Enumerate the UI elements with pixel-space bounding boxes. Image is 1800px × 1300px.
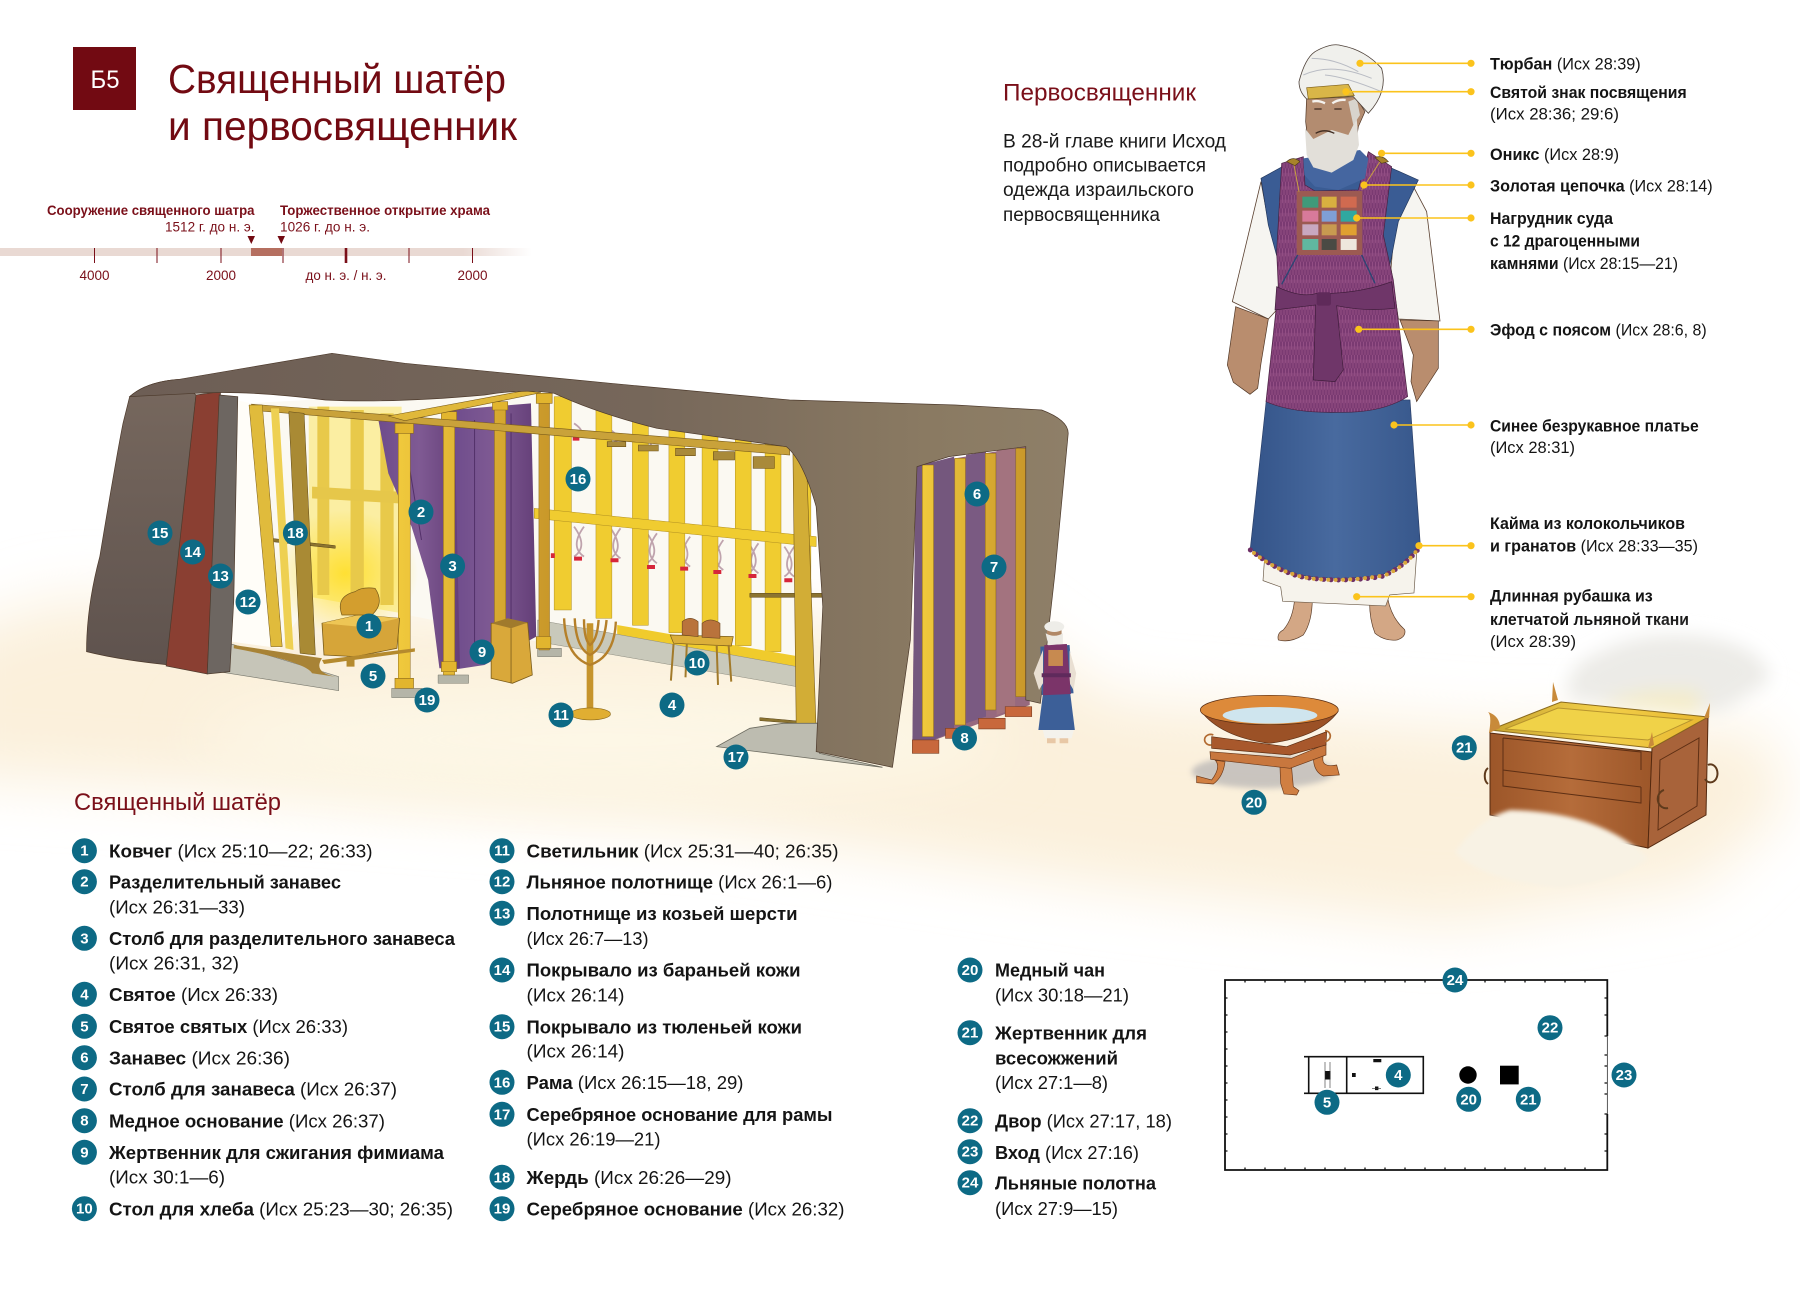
item 22: Двор (Исх 27:17, 18): [995, 1112, 1172, 1132]
title: Священный шатёр: [168, 56, 506, 102]
plan marker 24: 24: [1447, 972, 1464, 989]
item 2: Разделительный занавес: [109, 872, 341, 892]
laver bowl: [1201, 711, 1338, 743]
item 17: [490, 1102, 832, 1150]
marker 10: [684, 650, 710, 676]
item 17: (Исх 26:19—21): [526, 1130, 660, 1150]
laver stand: [1210, 744, 1326, 768]
plan marker 22: 22: [1542, 1020, 1558, 1037]
item 5: 5: [80, 1018, 89, 1035]
marker 12: 12: [240, 594, 256, 611]
altar horns: [1488, 682, 1710, 748]
laver water: [1223, 707, 1317, 724]
tabernacle outline: [1304, 1057, 1423, 1093]
label: hem: Кайма из колокольчиков: [1490, 515, 1685, 533]
holy crown band: [1307, 84, 1354, 99]
marker 16: [566, 466, 590, 492]
label: ephod: Эфод с поясом (Исх 28:6, 8): [1490, 322, 1707, 340]
linen curtain: [231, 399, 280, 648]
item 15: [490, 1014, 802, 1062]
fringe of bells and pomegranates: [1250, 547, 1420, 580]
item 10: Стол для хлеба (Исх 25:23—30; 26:35): [109, 1199, 453, 1219]
marker 18: 18: [287, 525, 304, 542]
callout: onyx: [1378, 150, 1475, 157]
back wall: [249, 387, 816, 688]
laver symbol: [1459, 1066, 1477, 1084]
bronze altar: [1455, 682, 1717, 888]
item 4: 4: [80, 986, 89, 1003]
marker 3: [440, 554, 465, 578]
item 8: [72, 1108, 385, 1133]
item 12: Льняное полотнище (Исх 26:1—6): [526, 872, 833, 892]
label: breastplate: [1490, 210, 1678, 273]
marker 5: [360, 664, 386, 688]
marker 7: [982, 554, 1006, 580]
plan marker 21: 21: [1520, 1091, 1537, 1108]
marker 7: 7: [990, 559, 998, 576]
marker 2: 2: [417, 504, 425, 521]
plan furniture: [1325, 1059, 1381, 1090]
face details: [1312, 100, 1346, 103]
list column 2: [490, 838, 844, 1221]
arms and hands: [1227, 307, 1438, 402]
marker 3: 3: [448, 558, 457, 575]
marker 9: [470, 640, 494, 664]
marker 8: 8: [960, 730, 969, 747]
turban: [1299, 45, 1383, 113]
ark of the covenant: [322, 588, 415, 667]
left socket row: [207, 644, 339, 691]
label: shirt: Длинная рубашка из: [1490, 588, 1653, 606]
callout: shirt: [1353, 593, 1475, 600]
marker 17: [724, 744, 748, 770]
item 2: [72, 869, 341, 917]
altar front face: [1490, 733, 1652, 848]
item 19: Серебряное основание (Исх 26:32): [526, 1199, 844, 1219]
item 24: 24: [962, 1175, 979, 1192]
item 11: Светильник (Исх 25:31—40; 26:35): [526, 841, 838, 861]
item 6: 6: [80, 1050, 89, 1067]
marker 12: [236, 590, 260, 614]
item 9: (Исх 30:1—6): [109, 1168, 225, 1188]
item 15: Покрывало из тюленьей кожи: [526, 1017, 802, 1037]
sand mound: [1455, 810, 1648, 888]
marker 5: 5: [369, 668, 377, 685]
marker 15: [148, 520, 172, 546]
callout: chain: [1360, 181, 1475, 189]
item 13: (Исх 26:7—13): [526, 929, 648, 949]
inner veil: [378, 403, 536, 670]
high priest section heading: Первосвященник: [1003, 80, 1196, 107]
plan marker 24: [1442, 968, 1468, 992]
lampstand: [564, 618, 616, 720]
item 23: 23: [962, 1144, 978, 1161]
marker 2: [408, 500, 434, 524]
marker 14: 14: [184, 544, 202, 561]
marker 19: [414, 688, 440, 712]
item 22: [958, 1108, 1172, 1133]
laver marker: [1242, 790, 1266, 815]
item 4: Святое (Исх 26:33): [109, 985, 278, 1005]
plan marker 20: [1456, 1087, 1481, 1112]
plan marker 4: 4: [1394, 1067, 1403, 1084]
label: holy sign: Святой знак посвящения: [1490, 84, 1687, 102]
marker 16: 16: [570, 471, 586, 488]
item 16: [490, 1070, 744, 1095]
plan marker 23: [1612, 1062, 1636, 1088]
bronze laver: [1192, 695, 1339, 795]
label: shirt: (Исх 28:39): [1490, 633, 1576, 651]
list column 3: [958, 958, 1172, 1219]
label: robe: Синее безрукавное платье: [1490, 418, 1699, 436]
plan marker 5: [1314, 1090, 1340, 1115]
label: shirt: [1490, 588, 1689, 651]
item 10: 10: [76, 1201, 93, 1218]
label: holy sign: (Исх 28:36; 29:6): [1490, 105, 1619, 123]
item 13: [490, 901, 798, 949]
laver feet: [1197, 755, 1339, 795]
item 14: 14: [494, 962, 511, 979]
item 20: Медный чан: [995, 961, 1105, 981]
smoke: [1568, 635, 1770, 715]
timeline: 2000: [457, 268, 488, 283]
marker 8: [952, 726, 977, 750]
altar front panels: [1503, 738, 1641, 803]
title badge Б5: Б5: [90, 66, 120, 94]
item 4: [72, 982, 278, 1007]
item 17: Серебряное основание для рамы: [526, 1105, 832, 1125]
marker 17: 17: [728, 749, 744, 766]
item 16: Рама (Исх 26:15—18, 29): [526, 1073, 744, 1093]
item 14: (Исх 26:14): [526, 985, 624, 1005]
callout: ephod: [1355, 326, 1475, 333]
timeline: 2000: [206, 268, 236, 283]
sash: [1275, 282, 1395, 382]
high priest figure: [1227, 45, 1440, 641]
blue robe: [1250, 400, 1420, 578]
item 3: (Исх 26:31, 32): [109, 954, 239, 974]
linen sleeves: [1232, 182, 1440, 321]
item 21: всесожжений: [995, 1048, 1118, 1068]
tent number markers: [148, 466, 1006, 770]
item 13: 13: [494, 905, 510, 922]
title: и первосвященник: [168, 103, 518, 149]
label: robe: [1490, 418, 1699, 457]
shoulder robe: [1261, 163, 1418, 265]
marker 6: 6: [973, 486, 981, 503]
item 5: [72, 1014, 348, 1039]
item 21: [958, 1020, 1147, 1093]
laver rings: [1205, 731, 1330, 745]
marker 13: 13: [212, 568, 229, 585]
item 2: (Исх 26:31—33): [109, 897, 245, 917]
beams and crossbars: [249, 391, 823, 725]
marker 11: [548, 702, 574, 728]
altar right face: [1648, 717, 1708, 848]
item 9: 9: [80, 1144, 89, 1161]
title badge Б5: [73, 47, 136, 110]
item 15: 15: [494, 1019, 510, 1036]
marker 18: [283, 520, 308, 546]
callout: breastplate: [1353, 214, 1475, 222]
tabernacle list heading: Священный шатёр: [74, 789, 281, 816]
item 18: 18: [494, 1169, 510, 1186]
callout: hem: [1415, 542, 1475, 549]
list column 1: [72, 838, 456, 1221]
high priest small figure: [1034, 621, 1076, 743]
showbread table: [670, 618, 733, 685]
incense altar: [491, 618, 532, 683]
front wall frame post: [717, 453, 882, 767]
plan marker 22: [1538, 1015, 1562, 1040]
high priest description: подробно описывается: [1003, 156, 1206, 177]
label: hem: и гранатов (Исх 28:33—35): [1490, 538, 1698, 556]
item 18: Жердь (Исх 26:26—29): [525, 1168, 732, 1188]
item 20: [958, 958, 1129, 1006]
beard: [1305, 118, 1359, 173]
altar marker: [1452, 735, 1477, 760]
timeline: 1026 г. до н. э.: [280, 220, 370, 234]
desert ground glow: [0, 600, 1790, 925]
altar right panel: [1658, 738, 1699, 830]
timeline: [0, 203, 532, 283]
label: breastplate: с 12 драгоценными: [1490, 233, 1640, 251]
long linen shirt: [1263, 544, 1417, 606]
courtyard plan: [1225, 968, 1636, 1170]
item 2: 2: [80, 874, 89, 891]
marker 11: 11: [553, 707, 569, 724]
item 22: 22: [962, 1113, 978, 1130]
item 7: Столб для занавеса (Исх 26:37): [109, 1080, 397, 1100]
timeline: до н. э. / н. э.: [306, 268, 386, 283]
callout: holy sign: [1342, 88, 1475, 95]
item 1: 1: [80, 843, 89, 860]
item 23: Вход (Исх 27:16): [995, 1143, 1139, 1163]
item 14: Покрывало из бараньей кожи: [526, 961, 800, 981]
item 24: [958, 1170, 1157, 1219]
item 1: [72, 838, 373, 863]
marker 4: 4: [668, 697, 677, 714]
item 21: 21: [962, 1025, 978, 1042]
plan marker 20: 20: [1460, 1091, 1477, 1108]
high priest description: одежда израильского: [1003, 180, 1194, 201]
seal skin covering: [87, 379, 196, 665]
item 3: 3: [80, 930, 89, 947]
label: hem: [1490, 515, 1698, 556]
plan marker 21: [1516, 1087, 1541, 1112]
marker 4: [660, 692, 684, 718]
label: breastplate: Нагрудник суда: [1490, 210, 1614, 228]
marker 1: [356, 614, 382, 638]
laver rim: [1200, 695, 1338, 725]
marker 9: 9: [478, 644, 486, 661]
ephod: [1266, 152, 1408, 412]
item 9: Жертвенник для сжигания фимиама: [108, 1143, 445, 1163]
item 3: Столб для разделительного занавеса: [109, 929, 456, 949]
ram skin covering: [166, 392, 221, 674]
item 5: Святое святых (Исх 26:33): [109, 1017, 348, 1037]
item 7: [72, 1076, 397, 1102]
label: onyx: Оникс (Исх 28:9): [1490, 146, 1619, 164]
item 20: (Исх 30:18—21): [995, 986, 1129, 1006]
item 21: (Исх 27:1—8): [995, 1073, 1108, 1093]
item 19: 19: [494, 1201, 510, 1218]
item 23: [958, 1139, 1139, 1164]
priest garment labels: [1490, 55, 1713, 651]
item 1: Ковчег (Исх 25:10—22; 26:33): [109, 841, 372, 861]
item 8: Медное основание (Исх 26:37): [109, 1111, 385, 1131]
item 21: Жертвенник для: [994, 1023, 1147, 1043]
marker 19: 19: [419, 692, 435, 709]
item 16: 16: [494, 1074, 510, 1091]
callout: turban: [1356, 60, 1475, 67]
marker 14: [180, 540, 205, 564]
marker 10: 10: [689, 655, 705, 672]
plan marker 23: 23: [1616, 1067, 1632, 1084]
entrance screen curtains: [912, 446, 1032, 753]
left frames: [249, 405, 315, 655]
label: turban: Тюрбан (Исх 28:39): [1490, 55, 1641, 73]
marker 1: 1: [365, 618, 373, 635]
high priest description: В 28-й главе книги Исход: [1003, 131, 1226, 152]
sash knot: [1317, 292, 1331, 306]
onyx stones: [1287, 157, 1388, 166]
item 11: [490, 838, 838, 863]
plan marker 4: [1386, 1062, 1411, 1088]
item 13: Полотнище из козьей шерсти: [526, 904, 798, 924]
item 24: Льняные полотна: [995, 1173, 1157, 1193]
laver marker: 20: [1246, 794, 1262, 811]
altar symbol: [1500, 1066, 1519, 1084]
item 14: [490, 958, 800, 1005]
goat hair covering: [207, 395, 238, 674]
laver frame: [1212, 732, 1327, 755]
item 3: [72, 926, 456, 974]
item 7: 7: [80, 1081, 89, 1098]
timeline: 1512 г. до н. э.: [165, 220, 254, 234]
item 6: Занавес (Исх 26:36): [109, 1048, 290, 1068]
label: shirt: клетчатой льняной ткани: [1490, 611, 1689, 629]
marker 15: 15: [152, 525, 168, 542]
label: breastplate: камнями (Исх 28:15—21): [1490, 255, 1678, 273]
item 8: 8: [80, 1113, 89, 1130]
label: robe: (Исх 28:31): [1490, 439, 1575, 457]
altar marker: 21: [1456, 740, 1473, 757]
item 12: 12: [494, 874, 510, 891]
timeline: Сооружение священного шатра: [47, 203, 255, 218]
head: [1306, 97, 1365, 145]
tabernacle illustration: [87, 353, 1076, 767]
feet: [1278, 598, 1405, 641]
timeline: 4000: [79, 268, 110, 283]
item 24: (Исх 27:9—15): [995, 1199, 1118, 1219]
label: chain: Золотая цепочка (Исх 28:14): [1490, 178, 1713, 196]
timeline: Торжественное открытие храма: [280, 203, 490, 218]
plan marker 5: 5: [1323, 1094, 1331, 1111]
item 20: 20: [962, 962, 978, 979]
callout: robe: [1390, 421, 1475, 429]
high priest description: первосвященника: [1003, 205, 1160, 226]
laver shadow: [1192, 755, 1335, 788]
turban folds: [1303, 58, 1382, 92]
marker 6: [964, 482, 990, 506]
courtyard wall: [1225, 980, 1607, 1170]
item 9: [72, 1140, 445, 1188]
callout lines: [1342, 60, 1475, 600]
item 11: 11: [494, 843, 510, 860]
altar rings: [1485, 764, 1717, 808]
neck collar: [1303, 150, 1368, 190]
marker 13: [208, 564, 233, 588]
item 18: [490, 1165, 732, 1190]
breastplate: [1282, 162, 1380, 284]
item 15: (Исх 26:14): [526, 1042, 624, 1062]
altar top interior: [1490, 702, 1708, 748]
veil lines: [1325, 1062, 1381, 1088]
item 6: [72, 1045, 290, 1070]
pillars with sockets: [392, 393, 561, 698]
roof covering and hanging drape: [130, 353, 1068, 767]
item 17: 17: [494, 1106, 510, 1123]
